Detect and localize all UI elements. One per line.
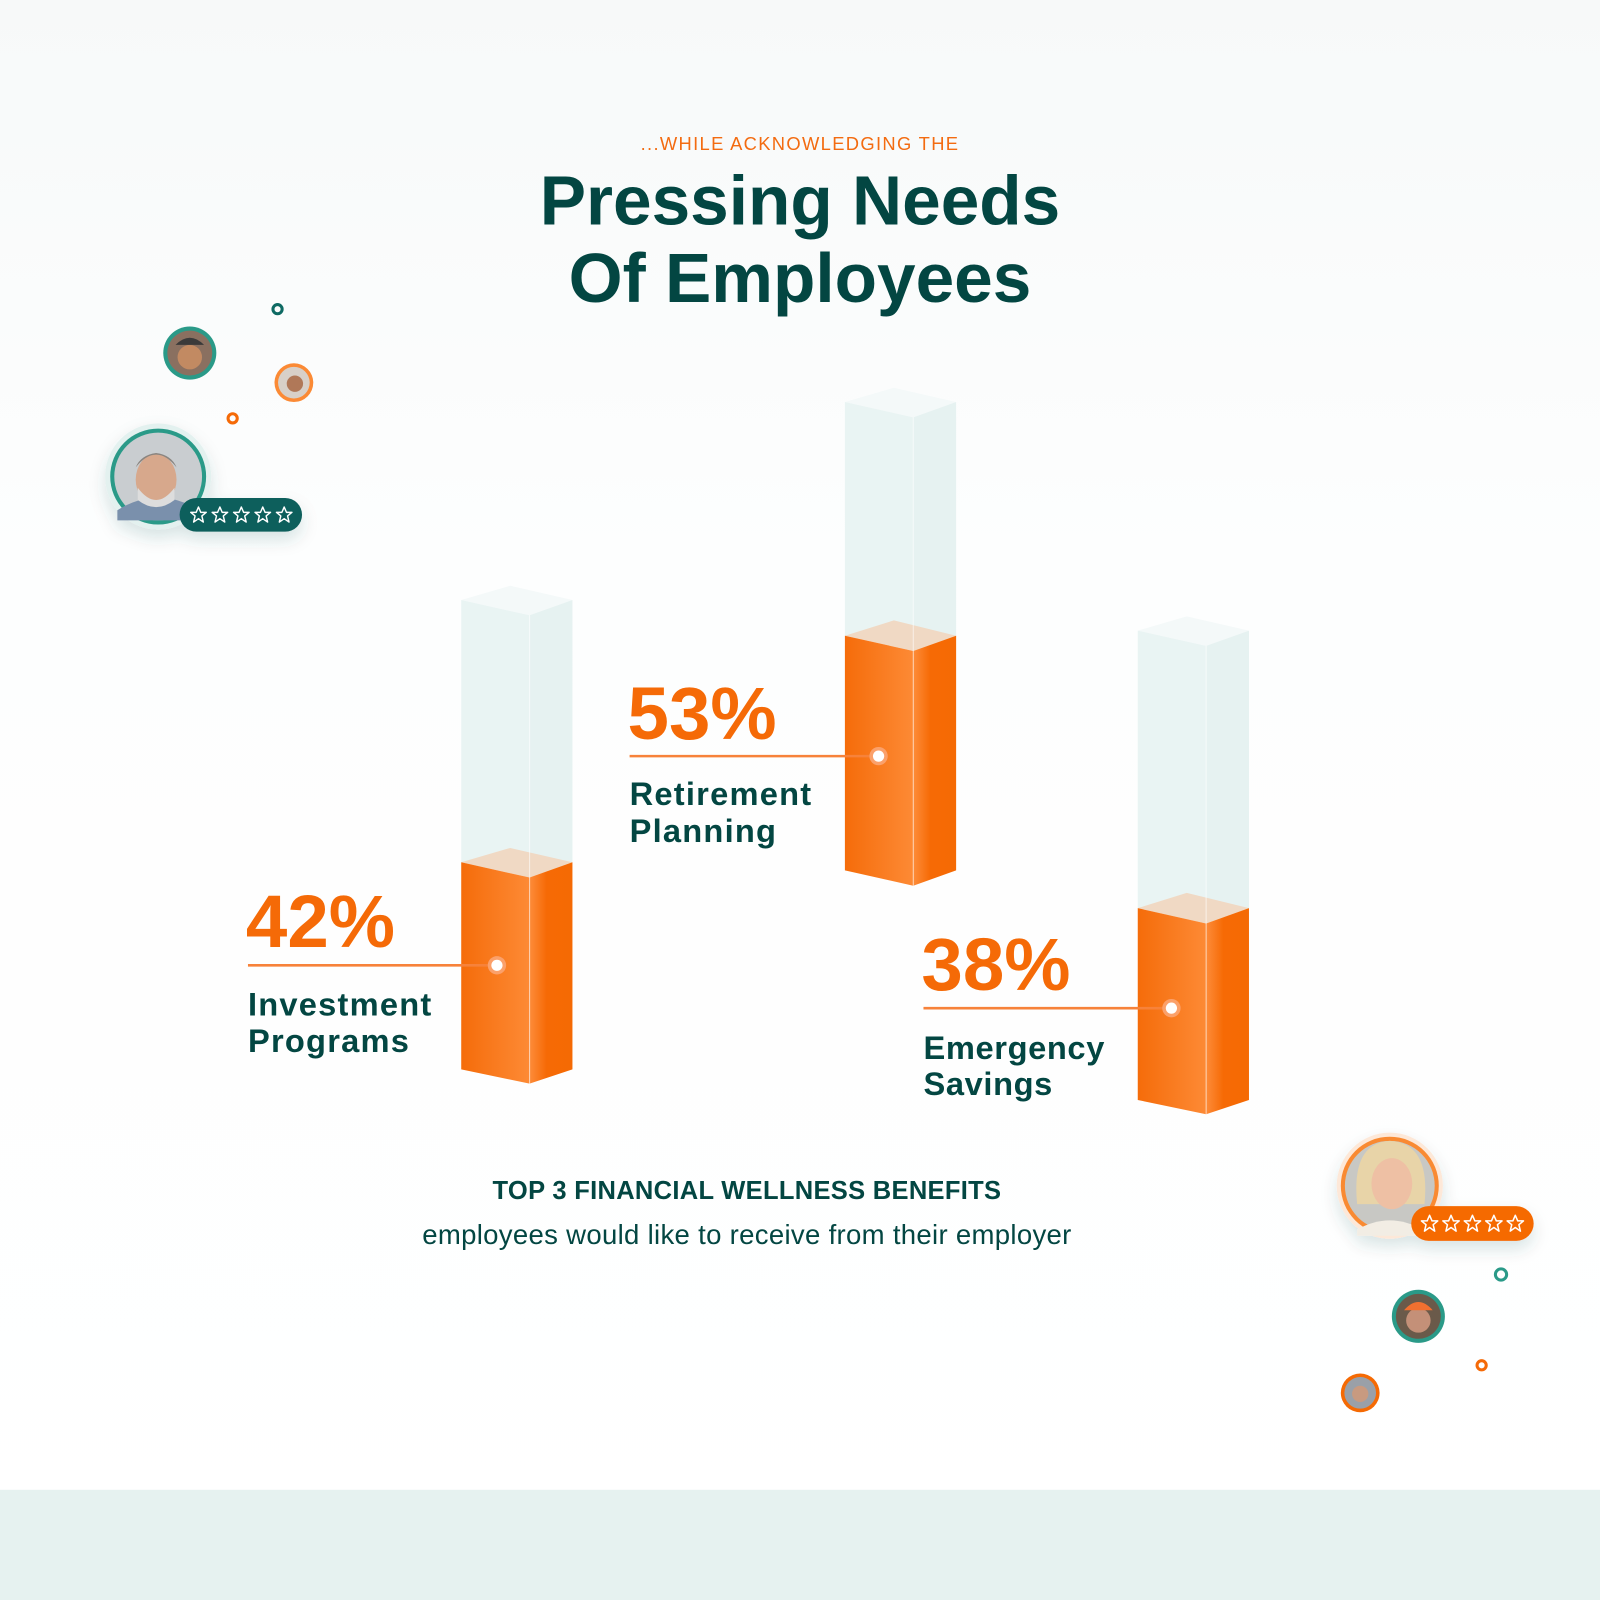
callout: 53% retirement planning: Retirement (630, 775, 812, 812)
bar: investment programs 42% (461, 586, 572, 1084)
eyebrow heading: ...WHILE ACKNOWLEDGING THE (641, 133, 959, 154)
avatar: small man cap (163, 327, 216, 380)
callout: 38% emergency savings: Savings (923, 1065, 1053, 1102)
callout: 53% retirement planning (628, 672, 888, 849)
footer band (0, 1490, 1600, 1600)
callout: 42% investment programs: 42% (246, 880, 395, 963)
avatar with rating: man glasses (105, 423, 302, 532)
bar: retirement planning 53% (845, 388, 956, 886)
avatar: small woman (274, 363, 313, 402)
callout: 38% emergency savings: Emergency (923, 1029, 1105, 1066)
title: Of Employees (569, 239, 1031, 317)
callout: 38% emergency savings: 38% (921, 923, 1070, 1006)
callout: 38% emergency savings (921, 923, 1181, 1102)
caption: employees would like to receive from their employer (422, 1219, 1072, 1250)
avatar: small man (1341, 1373, 1380, 1412)
callout: 42% investment programs: Programs (248, 1022, 410, 1059)
callout: 42% investment programs: Investment (248, 985, 433, 1022)
callout: 53% retirement planning: Planning (630, 812, 777, 849)
bar: emergency savings 38% (1138, 616, 1249, 1114)
caption (422, 1177, 1072, 1250)
avatar: man orange cap (1392, 1290, 1445, 1343)
callout: 53% retirement planning: 53% (628, 672, 777, 755)
title: Pressing Needs (540, 161, 1060, 239)
decorative dots (228, 305, 1507, 1370)
callout: 42% investment programs (246, 880, 506, 1059)
title (540, 161, 1060, 317)
avatar with rating: woman blonde (1337, 1133, 1534, 1241)
caption: TOP 3 FINANCIAL WELLNESS BENEFITS (493, 1177, 1001, 1205)
